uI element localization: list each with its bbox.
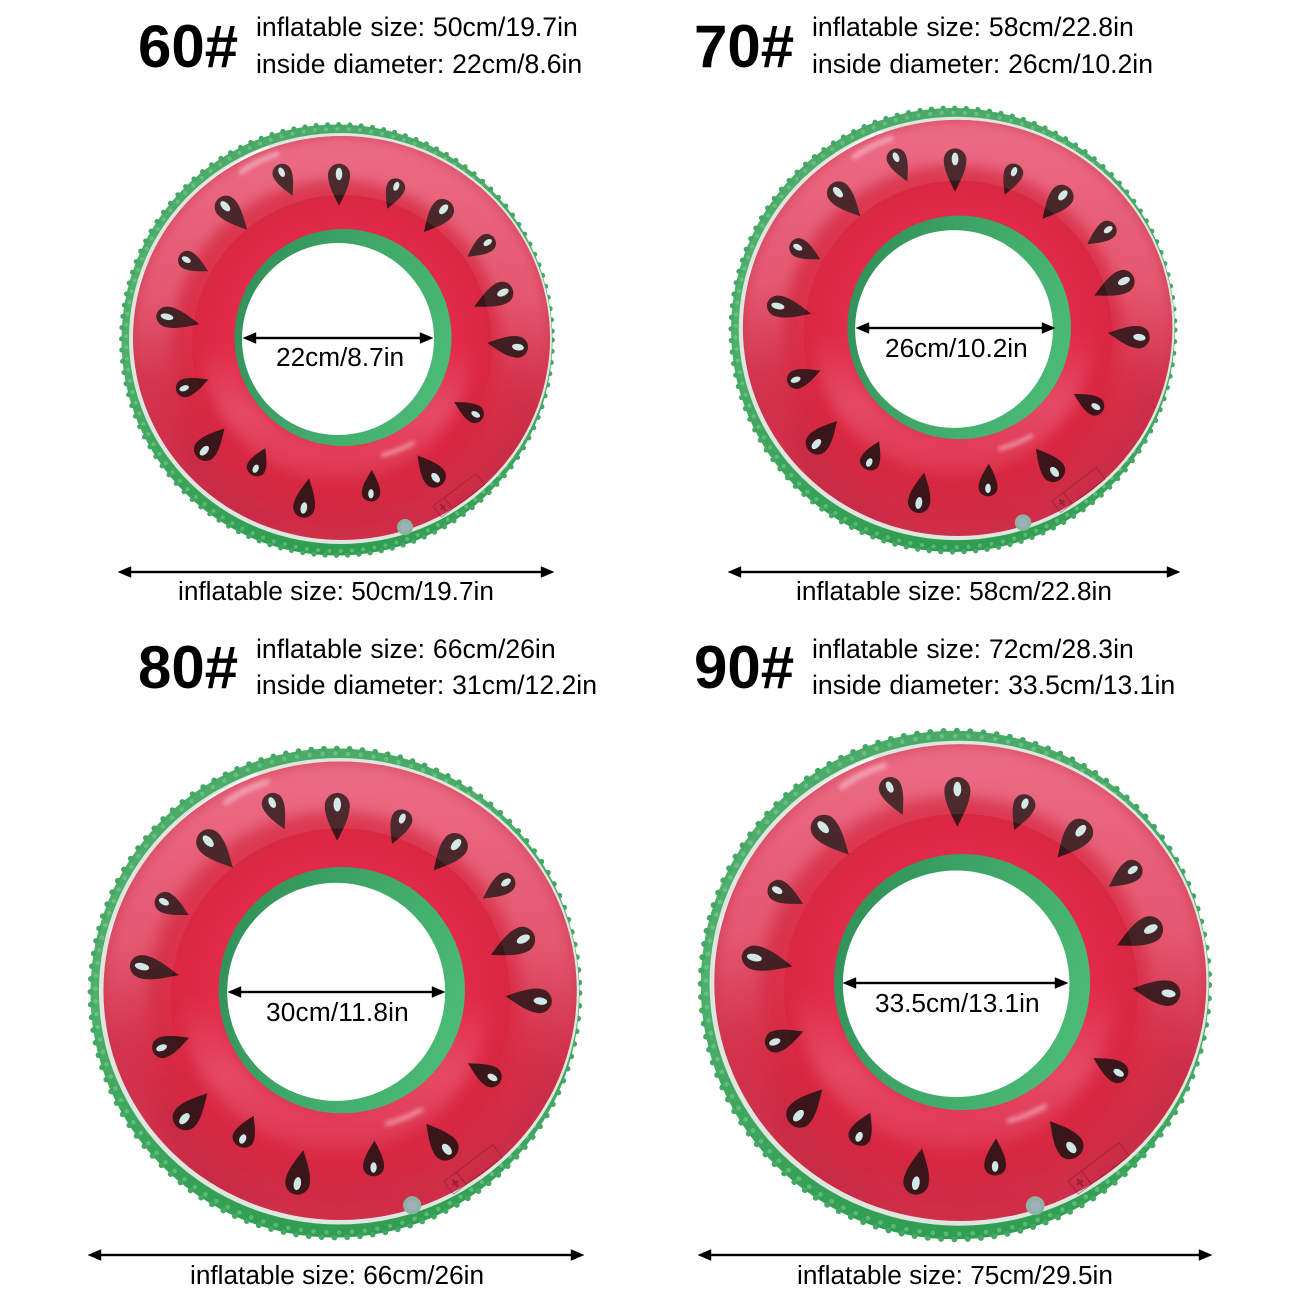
arrow: outer size 60# — [118, 566, 554, 578]
label: inside diameter 70#: 26cm/10.2in — [885, 333, 1028, 363]
spec text: 90# sizes: inside diameter: 33.5cm/13.1in — [812, 670, 1175, 700]
panel: size 60# — [118, 12, 582, 606]
label: inside diameter 60#: 22cm/8.7in — [276, 342, 404, 372]
spec text: 80# sizes: inflatable size: 66cm/26in — [256, 634, 556, 664]
panel: size 90# — [694, 634, 1212, 1290]
arrow: outer size 80# — [88, 1250, 584, 1260]
label: outer size 70#: inflatable size: 58cm/22.8in — [796, 576, 1112, 606]
arrow: inside diameter 70# — [856, 322, 1055, 334]
arrow: inside diameter 90# — [843, 978, 1068, 988]
panel: size 80# — [88, 634, 597, 1290]
arrow: outer size 70# — [728, 566, 1180, 578]
spec text: 60# sizes: inflatable size: 50cm/19.7in — [256, 12, 578, 42]
heading: 90#: 90# — [694, 634, 794, 701]
spec text: 80# sizes: inside diameter: 31cm/12.2in — [256, 670, 597, 700]
watermelon ring 90# — [701, 731, 1209, 1239]
spec text: 80# sizes — [256, 634, 597, 700]
heading: 60#: 60# — [138, 13, 238, 80]
spec text: 70# sizes — [812, 12, 1153, 79]
watermelon ring 80# — [90, 748, 580, 1238]
arrow: outer size 90# — [698, 1250, 1212, 1260]
watermelon ring 70# — [731, 108, 1175, 552]
spec text: 70# sizes: inside diameter: 26cm/10.2in — [812, 49, 1153, 79]
spec text: 70# sizes: inflatable size: 58cm/22.8in — [812, 12, 1134, 42]
label: outer size 80#: inflatable size: 66cm/26in — [190, 1260, 484, 1290]
panel: size 70# — [694, 12, 1180, 606]
label: inside diameter 90#: 33.5cm/13.1in — [875, 988, 1040, 1018]
arrow: inside diameter 80# — [228, 986, 445, 998]
spec text: 90# sizes — [812, 634, 1175, 700]
label: outer size 90#: inflatable size: 75cm/29.5in — [797, 1260, 1113, 1290]
heading: 80#: 80# — [138, 634, 238, 701]
arrow: inside diameter 60# — [243, 332, 433, 344]
heading: 70#: 70# — [694, 13, 794, 80]
spec text: 60# sizes — [256, 12, 582, 79]
label: inside diameter 80#: 30cm/11.8in — [266, 997, 409, 1027]
spec text: 90# sizes: inflatable size: 72cm/28.3in — [812, 634, 1134, 664]
spec text: 60# sizes: inside diameter: 22cm/8.6in — [256, 49, 582, 79]
watermelon ring 60# — [122, 124, 552, 556]
label: outer size 60#: inflatable size: 50cm/19.7in — [178, 576, 494, 606]
